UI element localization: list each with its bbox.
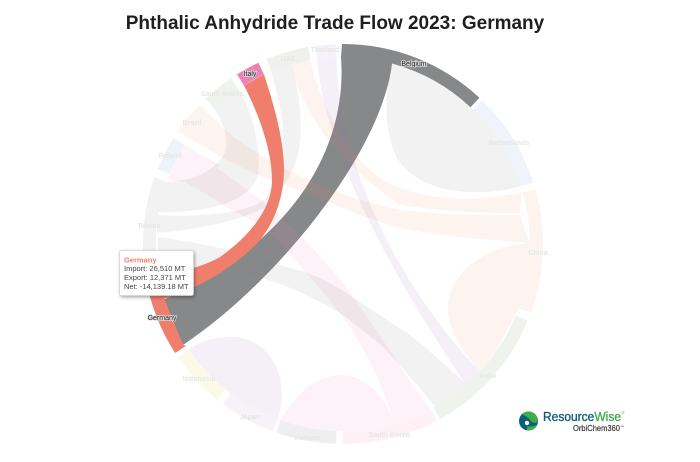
- highlighted country labels: [148, 61, 427, 322]
- faded country labels: India: [480, 373, 496, 380]
- ring: South Korea: [343, 409, 437, 444]
- highlighted country labels: Germany: [148, 315, 177, 322]
- logo: ResourceWise OrbiChem360: OrbiChem360: [573, 423, 620, 433]
- faded country labels: Taiwan: [137, 223, 161, 230]
- ring: Brazil: [178, 105, 208, 138]
- ribbon: Brazil to China: [189, 114, 530, 243]
- ring: Germany: [146, 276, 186, 353]
- ring: India: [434, 316, 528, 419]
- faded country labels: Poland: [158, 153, 182, 160]
- ribbon: UAE to Taiwan: [157, 62, 301, 233]
- ribbon: UAE to China: [290, 60, 522, 213]
- faded country labels: South Korea: [368, 432, 410, 439]
- icon: globe: [519, 411, 538, 431]
- ribbon: Poland to South Korea: [168, 145, 431, 424]
- logo: ResourceWise OrbiChem360: [519, 409, 624, 433]
- tooltip: Import: 26,510 MT: [124, 264, 186, 273]
- tooltip: Germany: [124, 256, 157, 264]
- ring: UAE: [266, 47, 310, 71]
- ribbon: Belgium to Netherlands: [386, 64, 522, 192]
- highlighted country labels: Italy: [244, 71, 257, 78]
- tooltip: [120, 250, 194, 296]
- ring and ribbon: Belgium to Germany: [163, 44, 479, 345]
- ribbon: China to India: [448, 243, 530, 372]
- ring: Italy: [237, 63, 264, 85]
- logo: ResourceWise OrbiChem360: ®: [622, 410, 624, 415]
- faded country labels: [137, 47, 548, 442]
- ring: Thailand: [315, 44, 336, 59]
- ribbon: Thailand to India: [317, 57, 480, 388]
- ribbon: Italy to Germany: [159, 74, 284, 299]
- faded country labels: China: [528, 250, 548, 257]
- logo: ResourceWise OrbiChem360: ™: [620, 425, 624, 429]
- ribbon: Indonesia to Japan: [189, 337, 282, 419]
- faded country labels: Japan: [240, 414, 260, 421]
- faded country labels: UAE: [281, 56, 296, 63]
- chord diagram: [143, 44, 543, 444]
- ring: Netherlands: [473, 100, 533, 186]
- faded country labels: Brazil: [182, 120, 202, 127]
- ring: China: [519, 189, 543, 312]
- ring: Poland: [158, 138, 184, 174]
- ribbon: Taiwan to India: [158, 237, 470, 408]
- ring: Taiwan: [143, 177, 167, 272]
- faded country labels: Thailand: [311, 47, 339, 54]
- faded country labels: Vietnam: [293, 435, 321, 442]
- faded country labels: Saudi Arabia: [201, 91, 243, 98]
- highlighted country labels: Belgium: [401, 61, 427, 68]
- logo: ResourceWise OrbiChem360: ResourceWise: [543, 409, 621, 424]
- faded country labels: Netherlands: [489, 140, 529, 147]
- ribbon: Saudi Arabia to Taiwan: [157, 89, 259, 212]
- ring: Japan: [223, 393, 278, 431]
- ribbon: Vietnam to South Korea: [280, 375, 395, 431]
- ring: Indonesia: [178, 350, 225, 399]
- title: Phthalic Anhydride Trade Flow 2023: Germany: [126, 13, 545, 34]
- tooltip: Export: 12,371 MT: [124, 273, 186, 282]
- ring: Saudi Arabia: [205, 78, 238, 108]
- faded country labels: Indonesia: [183, 376, 215, 383]
- ring: Vietnam: [276, 420, 336, 444]
- tooltip: Net: -14,139.18 MT: [124, 282, 189, 291]
